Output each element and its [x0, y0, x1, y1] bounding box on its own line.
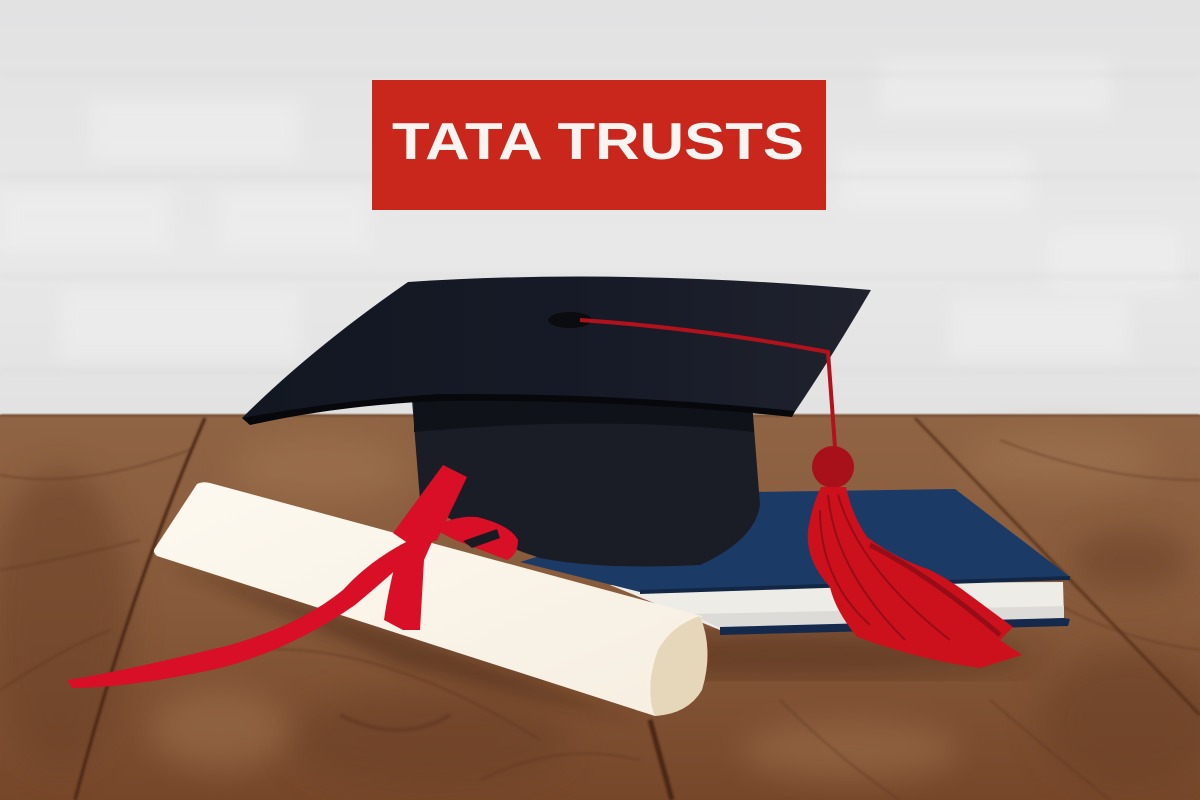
- tassel cord and tassel: [548, 312, 1022, 668]
- book: [520, 489, 1070, 635]
- wooden table: [0, 414, 1200, 800]
- graduation cap board: [242, 277, 871, 425]
- logo: Tata Trusts: [372, 80, 826, 210]
- diploma scroll with ribbon: [67, 465, 708, 716]
- logo: Tata Trusts: TATA TRUSTS: [392, 113, 804, 171]
- ribbon: [67, 465, 518, 688]
- graduation cap base: [412, 400, 760, 566]
- brick wall background: [0, 0, 1200, 416]
